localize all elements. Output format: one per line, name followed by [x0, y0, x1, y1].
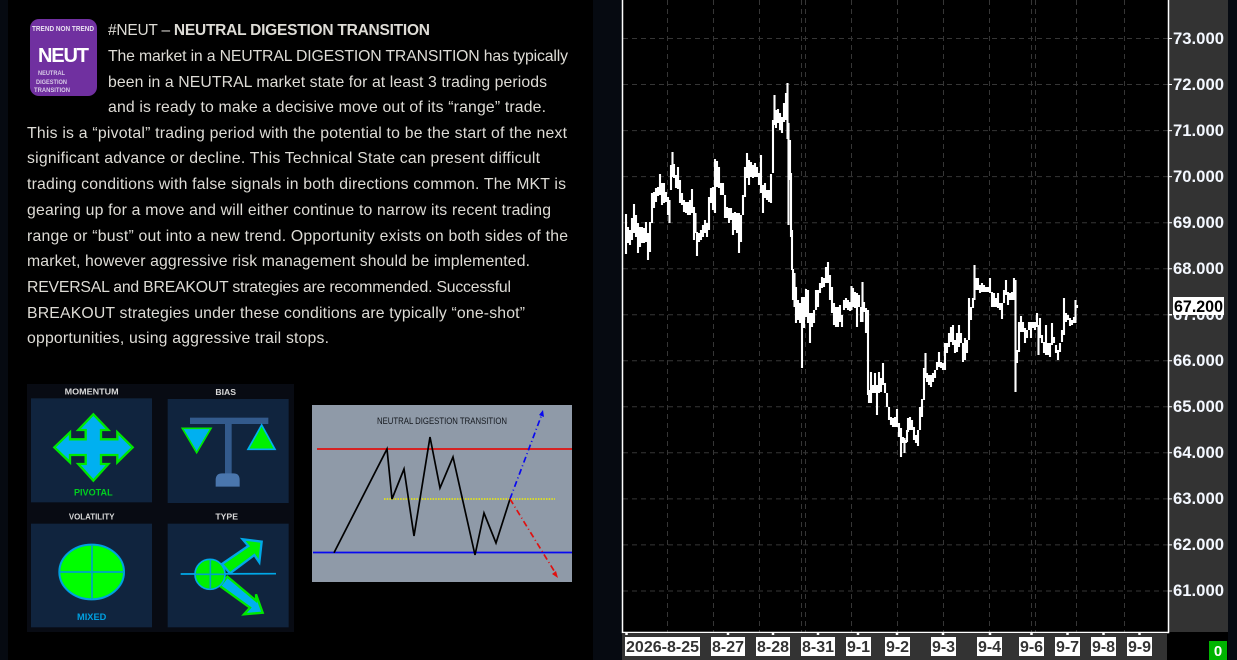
chart border [622, 0, 1168, 632]
panel: price axis: 65.000 [1173, 398, 1224, 416]
text block: description: BREAKOUT strategies under these conditions are typically “one-shot” [27, 305, 525, 322]
panel: date axis: 9-2 [886, 639, 909, 656]
panel: price axis: 61.000 [1173, 582, 1224, 600]
panel: price axis: 71.000 [1173, 122, 1224, 140]
text block: description: market, however aggressive risk management should be implemented. [27, 253, 530, 270]
panel: price axis: 63.000 [1173, 490, 1224, 508]
panel: price axis: 70.000 [1173, 168, 1224, 186]
panel: date axis: 8-31 [802, 639, 834, 656]
chart: neutral digestion transition diagram [312, 405, 572, 582]
status badge [1209, 641, 1227, 660]
panel: price axis: 68.000 [1173, 260, 1224, 278]
label: pivotal: PIVOTAL [74, 488, 113, 498]
panel: price axis [1169, 0, 1228, 632]
chart: price plot area [622, 0, 1168, 632]
icon: NEUT badge: TRANSITION [34, 88, 70, 94]
icon: bias scale [182, 418, 275, 487]
current price label: 67.200 [1174, 298, 1223, 316]
panel: date axis: 8-27 [712, 639, 744, 656]
icon: NEUT badge: NEUTRAL [38, 71, 65, 77]
icon: NEUT badge: DIGESTION [36, 80, 67, 86]
panel: technical state dashboard [27, 384, 294, 632]
panel: price axis: 72.000 [1173, 76, 1224, 94]
icon: NEUT badge [30, 19, 97, 96]
text block: description: opportunities, using aggressive trail stops. [27, 330, 329, 347]
panel: date axis: 9-6 [1020, 639, 1043, 656]
text block: description: range or “bust” out into a new trend. Opportunity exists on both sides of the [27, 228, 568, 245]
panel: date axis [622, 633, 1167, 660]
text block: description: trading conditions with false signals in both directions common. The MKT is [27, 176, 566, 193]
panel: date axis: 9-8 [1092, 639, 1115, 656]
panel: date axis: 9-1 [847, 639, 870, 656]
panel: price axis: 69.000 [1173, 214, 1224, 232]
panel: price axis: 66.000 [1173, 352, 1224, 370]
text block: description: and is ready to make a decisive move out of its “range” trade. [108, 99, 546, 116]
panel: technical state dashboard: BIAS [215, 387, 236, 397]
price line [626, 83, 1077, 457]
diagram title: NEUTRAL DIGESTION TRANSITION [377, 416, 507, 427]
panel: price axis: 67.000 [1173, 306, 1224, 324]
icon: type branching arrows [181, 539, 276, 614]
panel: price axis: 73.000 [1173, 30, 1224, 48]
text block: description: REVERSAL and BREAKOUT strategies are recommended. Successful [27, 279, 511, 296]
panel: date axis: 9-4 [978, 639, 1001, 656]
panel: date axis: 9-3 [932, 639, 955, 656]
panel: date axis: 2026-8-25 [626, 639, 699, 656]
text block: description: This is a “pivotal” trading period with the potential to be the start of the next [27, 125, 568, 142]
panel: date axis: 9-9 [1128, 639, 1151, 656]
panel: technical state dashboard: VOLATILITY [69, 511, 115, 521]
panel: price axis: 62.000 [1173, 536, 1224, 554]
text block: description: been in a NEUTRAL market state for at least 3 trading periods [108, 74, 547, 91]
panel: technical state dashboard: TYPE [215, 511, 238, 521]
status badge: 0 [1214, 643, 1222, 660]
icon: NEUT badge: NEUT [38, 45, 89, 67]
text block: description: significant advance or decline. This Technical State can present difficult [27, 150, 541, 167]
text block: description: gearing up for a move and will either continue to narrow its recent trading [27, 202, 551, 219]
panel: date axis: 8-28 [757, 639, 789, 656]
icon: volatility ellipse [59, 545, 124, 599]
panel: technical state dashboard: MOMENTUM [65, 386, 119, 396]
icon: NEUT badge: TREND NON TREND [32, 24, 94, 33]
panel: date axis: 9-7 [1056, 639, 1079, 656]
heading: #NEUT – NEUTRAL DIGESTION TRANSITION [108, 22, 430, 39]
text block: description: The market in a NEUTRAL DIGESTION TRANSITION has typically [108, 48, 568, 65]
panel: price axis: 64.000 [1173, 444, 1224, 462]
text block: description [27, 48, 568, 347]
label: mixed: MIXED [77, 612, 107, 622]
icon: momentum four-way arrow [54, 414, 133, 481]
